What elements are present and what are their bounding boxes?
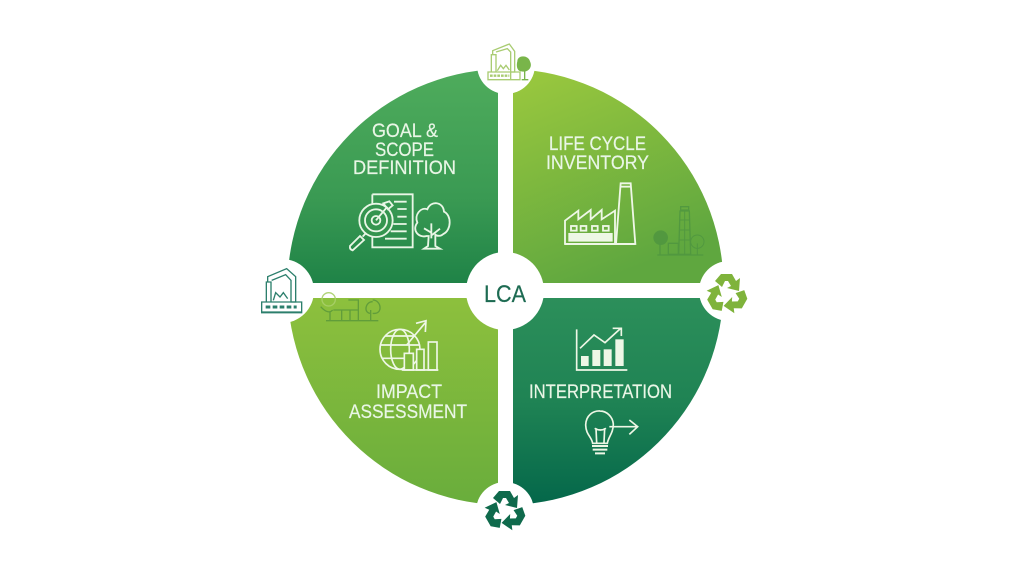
icon: right recycle symbol <box>703 274 750 315</box>
heading: goal and scope definition: SCOPE <box>375 140 434 161</box>
panel: goal and scope definition <box>288 69 498 283</box>
label: LCA: LCA <box>484 281 526 308</box>
panel: life cycle inventory <box>513 69 724 283</box>
quadrant: interpretation background <box>513 298 723 505</box>
node: right badge background <box>699 261 759 321</box>
icon: top factory and tree <box>488 44 531 80</box>
icon: document with target and magnifier, tree <box>350 194 450 250</box>
center hub <box>466 252 544 330</box>
heading: goal and scope definition: GOAL & <box>372 121 438 142</box>
icon: faint trees and building <box>321 293 380 321</box>
heading: impact assessment <box>349 382 467 423</box>
heading: life cycle inventory: LIFE CYCLE <box>549 134 646 155</box>
icon: bottom recycle symbol <box>481 491 528 532</box>
quadrant: life cycle inventory background <box>513 69 724 283</box>
heading: goal and scope definition <box>353 121 456 179</box>
icon: light bulb with arrow <box>586 411 638 453</box>
quadrant: goal and scope background <box>288 69 498 283</box>
node: top badge background <box>477 36 535 94</box>
icon: globe with rising bars <box>380 321 438 370</box>
heading: interpretation: INTERPRETATION <box>529 382 672 403</box>
heading: impact assessment: IMPACT <box>376 382 442 403</box>
icon: bar chart with rising line <box>577 328 627 370</box>
panel: interpretation <box>513 298 723 505</box>
icon: factory with chimney <box>565 183 635 244</box>
heading: life cycle inventory: INVENTORY <box>546 153 649 174</box>
node: bottom badge background <box>476 482 534 540</box>
heading: goal and scope definition: DEFINITION <box>353 158 456 179</box>
panel: impact assessment <box>288 293 498 505</box>
quadrant: impact assessment background <box>288 298 498 505</box>
node: left badge background <box>250 259 314 323</box>
heading: impact assessment: ASSESSMENT <box>349 402 467 423</box>
heading: life cycle inventory <box>546 134 649 174</box>
icon: faint tower and trees <box>653 207 704 255</box>
icon: left factory <box>261 269 302 313</box>
